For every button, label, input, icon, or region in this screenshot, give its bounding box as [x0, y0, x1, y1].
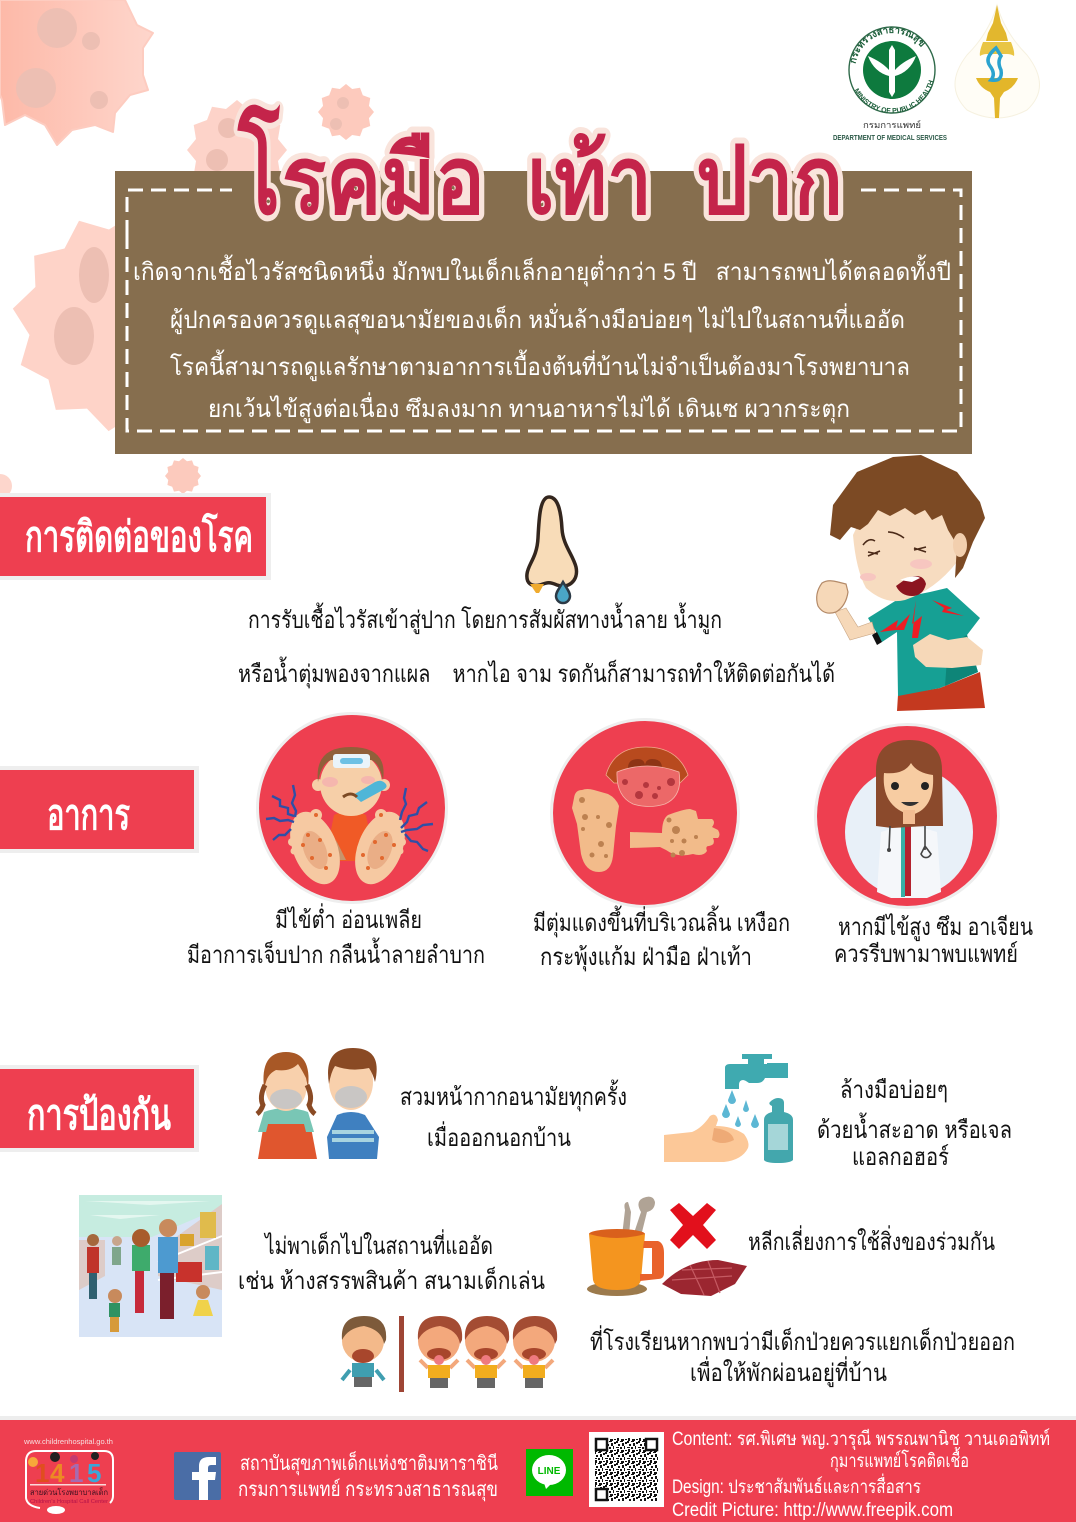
info panel: โรคนี้สามารถดูแลรักษาตามอาการเบื้องต้นที่บ้านไม่จำเป็นต้องมาโรงพยาบาล	[170, 349, 910, 382]
text block: symptom 2	[533, 905, 790, 972]
symptom: doctor	[814, 723, 1000, 909]
illustration: masked children	[257, 1048, 379, 1159]
logos: ministry and department: MINISTRY OF PUBLIC HEALTH	[854, 80, 934, 113]
icon: line: LINE	[538, 1466, 561, 1477]
text block: symptom 1: มีอาการเจ็บปาก กลืนน้ำลายลำบาก	[187, 937, 485, 969]
heading: prevention	[0, 1065, 199, 1152]
symptom: sick child	[256, 712, 448, 904]
text block: transmission: หรือน้ำตุ่มพองจากแผล หากไอ จาม รดกันก็สามารถทำให้ติดต่อกันได้	[238, 656, 835, 689]
heading: prevention: การป้องกัน	[27, 1091, 171, 1138]
text block: crowded places	[238, 1229, 545, 1295]
footer	[0, 1416, 1076, 1522]
text block: isolate at school	[590, 1325, 1015, 1388]
text block: hand washing: ด้วยน้ำสะอาด หรือเจล	[817, 1112, 1012, 1144]
icon: facebook	[174, 1452, 221, 1500]
heading: transmission	[0, 493, 271, 580]
footer: call center logo	[23, 1439, 113, 1514]
footer: call center logo: 4	[50, 1458, 65, 1488]
text block: symptom 3: หากมีไข้สูง ซึม อาเจียน	[838, 913, 1033, 942]
icon: hand washing	[664, 1054, 793, 1163]
text block: hand washing	[817, 1077, 1012, 1171]
illustration: crowded store	[79, 1195, 222, 1337]
text block: institute: สถาบันสุขภาพเด็กแห่งชาติมหาราชินี	[240, 1450, 498, 1476]
info panel: เกิดจากเชื้อไวรัสชนิดหนึ่ง มักพบในเด็กเล็กอายุต่ำกว่า 5 ปี สามารถพบได้ตลอดทั้งปี	[133, 254, 951, 287]
info panel: ยกเว้นไข้สูงต่อเนื่อง ซึมลงมาก ทานอาหารไม่ได้ เดินเซ ผวากระตุก	[208, 392, 850, 424]
title: เท้า	[527, 128, 652, 233]
heading: transmission: การติดต่อของโรค	[25, 512, 253, 560]
text block: symptom 2: กระพุ้งแก้ม ฝ่ามือ ฝ่าเท้า	[540, 944, 752, 972]
text block: symptom 3	[834, 913, 1033, 968]
text block: transmission	[238, 602, 835, 689]
logos: ministry and department	[833, 4, 1040, 142]
text block: symptom 1	[187, 903, 485, 969]
title: รคมือ	[282, 128, 485, 233]
text block: credits: Credit Picture: http://www.freepik.com	[672, 1500, 953, 1521]
title: โ	[237, 104, 280, 239]
symptom: mouth, foot, hand	[550, 718, 740, 908]
logos: ministry and department: DEPARTMENT OF MEDICAL SERVICES	[833, 135, 947, 142]
icon: runny nose	[527, 497, 577, 603]
text block: symptom 2: มีตุ่มแดงขึ้นที่บริเวณลิ้น เหงือก	[533, 905, 790, 938]
footer: call center logo: 5	[87, 1458, 101, 1488]
icon: shared cup and towel crossed out	[587, 1197, 747, 1296]
icon: line	[526, 1449, 573, 1496]
text block: masks	[400, 1079, 627, 1152]
text block: symptom 3: ควรรีบพามาพบแพทย์	[834, 940, 1018, 968]
title	[237, 104, 843, 239]
text block: hand washing: ล้างมือบ่อยๆ	[840, 1077, 948, 1104]
text block: masks: เมื่อออกนอกบ้าน	[427, 1121, 571, 1152]
footer: call center logo: www.childrenhospital.go.th	[23, 1439, 113, 1446]
footer: call center logo: สายด่วนโรงพยาบาลเด็ก	[30, 1487, 108, 1497]
text block: crowded places: ไม่พาเด็กไปในสถานที่แออัด	[263, 1229, 493, 1260]
info panel: ผู้ปกครองควรดูแลสุขอนามัยของเด็ก หมั่นล้างมือบ่อยๆ ไม่ไปในสถานที่แออัด	[170, 303, 905, 335]
heading: symptoms: อาการ	[47, 791, 130, 838]
text block: institute	[238, 1450, 498, 1502]
text block: do not share: หลีกเลี่ยงการใช้สิ่งของร่วมกัน	[748, 1225, 995, 1256]
text block: masks: สวมหน้ากากอนามัยทุกครั้ง	[400, 1079, 627, 1112]
logos: ministry and department: กรมการแพทย์	[863, 119, 921, 130]
text block: credits: กุมารแพทย์โรคติดเชื้อ	[830, 1447, 969, 1473]
text block: crowded places: เช่น ห้างสรรพสินค้า สนามเด็กเล่น	[238, 1266, 545, 1295]
logos: ministry and department: กระทรวงสาธารณสุข	[850, 28, 925, 64]
text block: transmission: การรับเชื้อไวรัสเข้าสู่ปาก โดยการสัมผัสทางน้ำลาย น้ำมูก	[248, 602, 722, 635]
text block: credits: Design: ประชาสัมพันธ์และการสื่อสาร	[672, 1473, 921, 1498]
illustration: isolating sick child	[342, 1316, 557, 1392]
text block: institute: กรมการแพทย์ กระทรวงสาธารณสุข	[238, 1478, 498, 1502]
footer: call center logo: 1	[69, 1458, 83, 1488]
illustration: coughing boy	[817, 455, 985, 711]
text block: credits	[672, 1428, 1050, 1521]
footer: call center logo: Children's Hospital Call Center	[30, 1499, 108, 1505]
text block: isolate at school: เพื่อให้พักผ่อนอยู่ที่บ้าน	[690, 1356, 887, 1388]
qr code	[589, 1432, 664, 1507]
info panel	[115, 171, 972, 454]
text block: hand washing: แอลกอฮอร์	[852, 1143, 949, 1171]
text block: symptom 1: มีไข้ต่ำ อ่อนเพลีย	[275, 903, 422, 934]
background virus decorations	[0, 0, 374, 498]
footer: call center logo: 1	[35, 1458, 49, 1488]
heading: symptoms	[0, 766, 199, 853]
title: ปาก	[696, 128, 843, 233]
